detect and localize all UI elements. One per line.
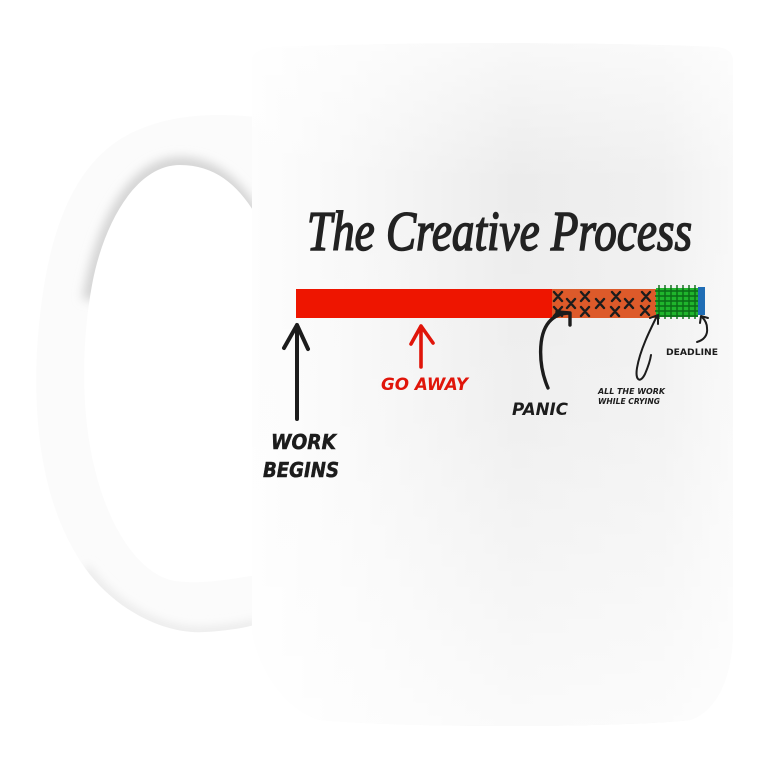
label: go away: GO AWAY <box>381 375 470 395</box>
label: all the work while crying: WHILE CRYING <box>598 397 660 406</box>
label: work begins: BEGINS <box>263 458 339 482</box>
mug body <box>252 43 733 726</box>
arrow: work begins <box>284 325 308 419</box>
arrow: go away <box>411 326 433 367</box>
timeline bar <box>296 285 705 319</box>
label: panic: PANIC <box>512 400 569 420</box>
arrow: panic <box>541 312 570 388</box>
segment: green crying work <box>655 285 698 319</box>
label: deadline: DEADLINE <box>666 348 718 358</box>
panic cross marks <box>554 292 650 316</box>
label: all the work while crying: ALL THE WORK <box>597 387 666 396</box>
segment: red work-free time <box>296 289 552 318</box>
segment: orange panic time <box>552 289 656 318</box>
label: work begins <box>263 430 339 482</box>
segment: blue deadline <box>698 287 705 315</box>
label: work begins: WORK <box>271 430 337 454</box>
arrow: all the work <box>637 315 658 380</box>
mug illustration <box>78 59 724 632</box>
label: all the work while crying <box>597 387 666 406</box>
mug handle <box>78 151 252 632</box>
arrow: deadline <box>697 316 708 342</box>
